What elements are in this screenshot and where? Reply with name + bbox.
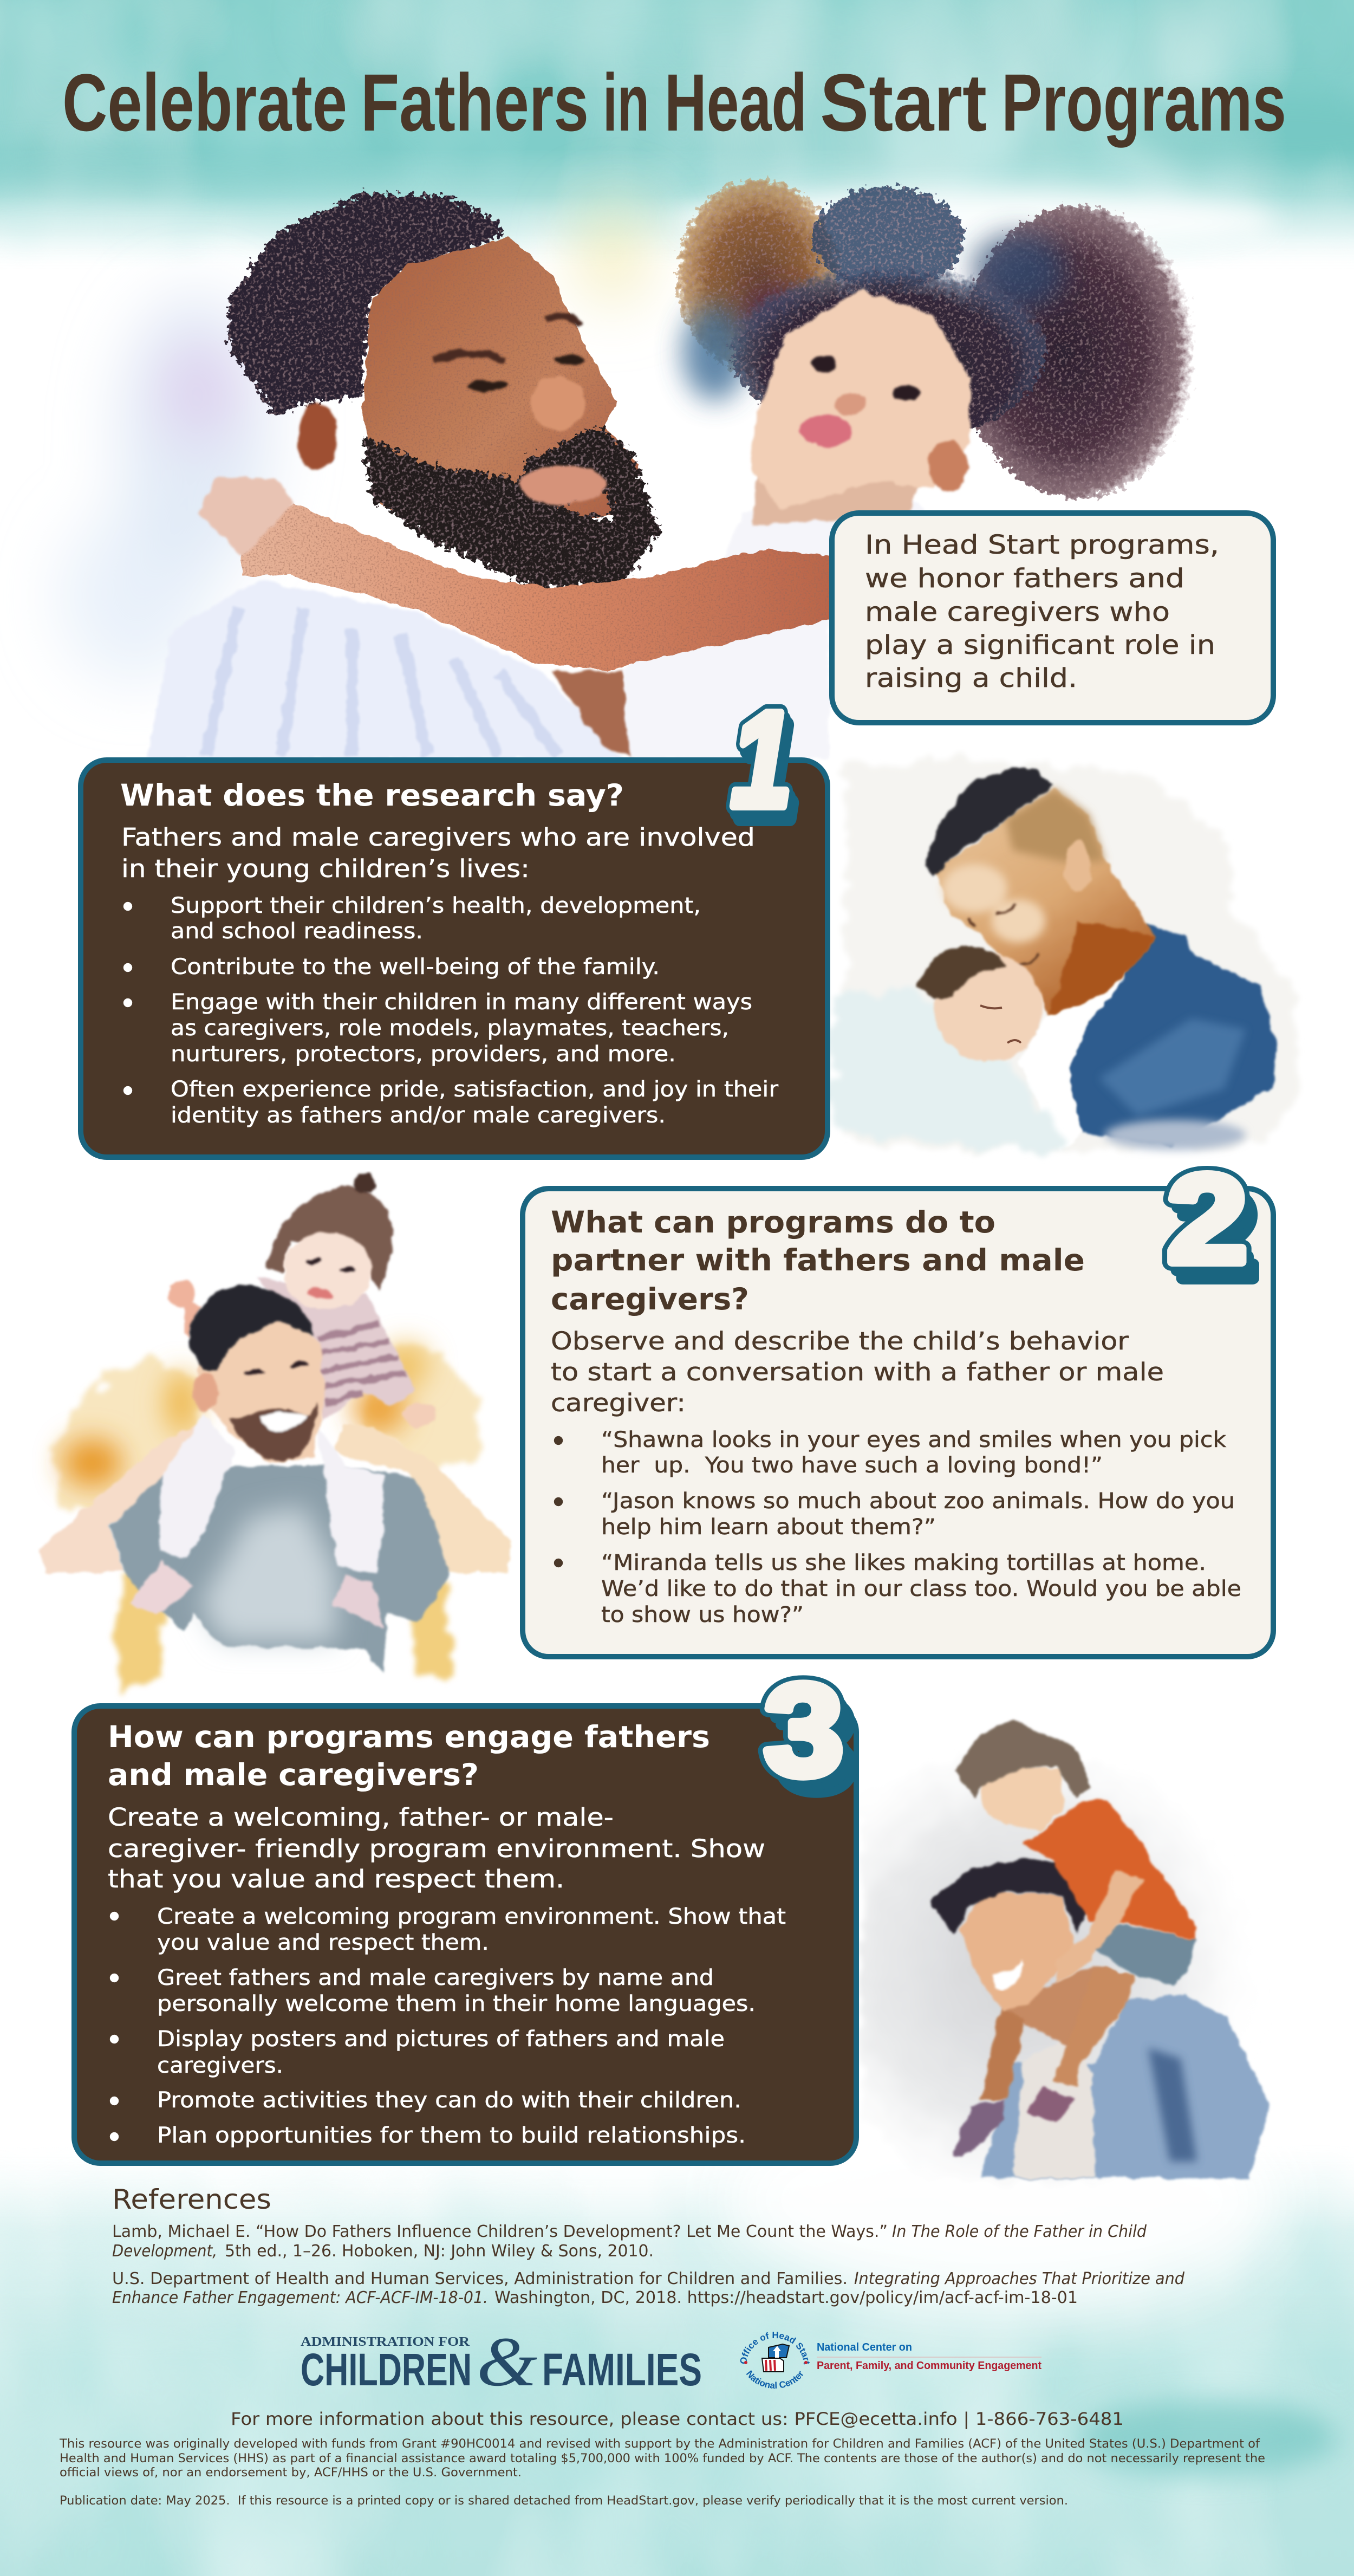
girl's hair left puff <box>677 179 839 374</box>
yellow washes <box>51 1338 485 1696</box>
bullet list: help him learn about them?” <box>601 1515 936 1540</box>
hair <box>925 770 1054 878</box>
bullet list: Plan opportunities for them to build relationships. <box>157 2123 746 2148</box>
title: Fathers <box>361 57 589 148</box>
face lights and features <box>942 864 1045 943</box>
intro text: caregiver: <box>551 1388 686 1417</box>
man's shirt <box>146 581 622 758</box>
man's smile <box>991 1958 1024 1988</box>
bullet list: personally welcome them in their home languages. <box>157 1991 756 2016</box>
reference 2: Washington, DC, 2018. https://headstart.gov/policy/im/acf-acf-im-18-01 <box>494 2288 1078 2307</box>
baby's hair <box>918 945 1007 1002</box>
number 2 badge: 2 <box>1167 1149 1247 1289</box>
shirt dark folds <box>1148 2048 1197 2162</box>
jacket bottom fade <box>1105 1120 1246 1150</box>
number 3 badge: 3 <box>777 1673 856 1818</box>
bullet list: Contribute to the well-being of the family. <box>171 955 660 979</box>
logo: National Center on Parent, Family, and Community Engagement: National Center on <box>817 2341 912 2353</box>
title: Head <box>665 57 807 148</box>
girl's hair right puff <box>961 206 1194 498</box>
intro text: in their young children’s lives: <box>121 854 530 883</box>
callout: intro message: play a significant role in <box>865 630 1215 660</box>
intro text <box>551 1327 1164 1417</box>
number 1 badge: 1 <box>731 684 792 835</box>
reference 1: Lamb, Michael E. “How Do Fathers Influence Children’s Development? Let Me Count the Ways.” <box>112 2222 888 2241</box>
boy's hair <box>955 1720 1091 1799</box>
reference 2: Enhance Father Engagement: ACF-ACF-IM-18-01. <box>112 2288 488 2307</box>
number 2 badge <box>1167 1149 1258 1306</box>
bullet list: “Jason knows so much about zoo animals. How do you <box>601 1489 1235 1514</box>
bullet list: you value and respect them. <box>157 1930 489 1955</box>
logo: Administration for Children & Families: FAMILIES <box>542 2344 702 2395</box>
bullet list: Create a welcoming program environment. Show that <box>157 1904 786 1929</box>
child's raised hand <box>167 1280 200 1338</box>
child's striped shirt <box>256 1279 416 1420</box>
heading <box>551 1205 1085 1316</box>
father's closed eyes and mouth <box>969 904 1040 970</box>
illustration: father carrying daughter on shoulders, yellow wash <box>40 1173 511 1696</box>
jacket highlight <box>1099 1018 1246 1116</box>
panel 1: what does the research say <box>81 760 828 1157</box>
girl's features <box>800 356 967 490</box>
bullet list <box>123 893 779 1128</box>
boy's shoes <box>953 2086 1074 2156</box>
heading: caregivers? <box>551 1282 749 1316</box>
intro text: Create a welcoming, father- or male- <box>108 1803 614 1832</box>
reference 2 <box>112 2269 1185 2307</box>
father's head and neck <box>935 788 1155 1016</box>
bullet list: and school readiness. <box>171 919 423 944</box>
heading: How can programs engage fathers <box>108 1720 710 1754</box>
logo: Office of Head Start National Center seal <box>740 2332 810 2389</box>
girl's hair top <box>812 187 964 290</box>
boy's face <box>980 1766 1064 1830</box>
illustration: father holding daughter (hero) <box>60 179 1194 758</box>
funding disclaimer: official views of, nor an endorsement by, ACF/HHS or the U.S. Government. <box>60 2466 522 2480</box>
panel 2: what can programs do <box>523 1189 1273 1657</box>
girl's neck <box>753 466 921 525</box>
funding disclaimer: This resource was originally developed with funds from Grant #90HC0014 and revised with support by the Administration for Children and Families (ACF) of the United States (U.S.) Department of <box>59 2437 1260 2451</box>
number 1 badge: 1 <box>734 690 795 841</box>
girl's hand <box>199 477 294 556</box>
intro text: to start a conversation with a father or male <box>551 1358 1164 1386</box>
child's extended hand <box>403 1401 436 1427</box>
man's ear <box>297 403 340 470</box>
callout: intro message: male caregivers who <box>865 597 1170 627</box>
man's beard <box>362 426 660 588</box>
yellow saturated spots <box>62 1344 428 1487</box>
title <box>62 57 1286 148</box>
funding disclaimer <box>59 2437 1265 2480</box>
man's beard and smile <box>194 1362 317 1460</box>
callout: intro message: we honor fathers and <box>865 563 1184 594</box>
man's neck and chest <box>1000 1965 1128 2047</box>
title: Start <box>820 57 987 148</box>
child's shoes <box>128 1562 383 1628</box>
man's mouth <box>520 465 607 504</box>
bullet list: identity as fathers and/or male caregivers. <box>171 1103 666 1128</box>
publication date: Publication date: May 2025. If this resource is a printed copy or is shared detached from HeadStart.gov, please verify periodically that it is the most current version. <box>60 2494 1068 2508</box>
man's hair <box>190 1285 313 1371</box>
baby's head <box>934 953 1043 1062</box>
number 1 badge: 1 <box>731 684 792 835</box>
callout: intro message: In Head Start programs, <box>865 530 1219 560</box>
callout: intro message: raising a child. <box>865 663 1077 693</box>
bullet list: nurturers, protectors, providers, and more. <box>171 1042 676 1067</box>
bullet list: Promote activities they can do with their children. <box>157 2088 741 2113</box>
fade haircut side <box>1006 788 1105 861</box>
baby's closed eye and mouth <box>980 1005 1021 1043</box>
ear <box>1065 840 1091 894</box>
child's bun <box>354 1173 375 1195</box>
bullet list <box>554 1427 1241 1627</box>
heading: What does the research say? <box>120 778 624 813</box>
t-shirt <box>1018 980 1123 1154</box>
child's face <box>283 1231 372 1309</box>
logo: Office of Head Start National Center seal: Office of Head Start <box>740 2332 810 2364</box>
bullet list: her up. You two have such a loving bond!” <box>601 1453 1103 1478</box>
logo: National Center on Parent, Family, and Community Engagement <box>817 2341 1041 2372</box>
number 1 badge: 1 <box>738 696 798 847</box>
bullet list: “Miranda tells us she likes making tortillas at home. <box>601 1550 1206 1575</box>
number 3 badge: 3 <box>764 1657 843 1802</box>
bullet list: Support their children’s health, development, <box>171 893 701 918</box>
heading: partner with fathers and male <box>551 1243 1085 1277</box>
intro text: caregiver- friendly program environment. Show <box>108 1834 765 1863</box>
girl's dress <box>622 477 924 758</box>
girl's arm around father's neck <box>242 503 831 670</box>
heading <box>108 1720 710 1792</box>
logo: Administration for Children & Families: CHILDREN <box>301 2344 472 2395</box>
bullet list: Greet fathers and male caregivers by name and <box>157 1965 714 1990</box>
bullet list <box>110 1904 786 2148</box>
girl's face <box>753 290 969 509</box>
intro text: Observe and describe the child’s behavior <box>551 1327 1129 1355</box>
funding disclaimer: Health and Human Services (HHS) as part of a financial assistance award totaling $5,700,000 with 100% funded by ACF. The contents are those of the author(s) and do not necessarily represent the <box>60 2452 1265 2465</box>
references heading: References <box>112 2184 271 2215</box>
heading: What can programs do to <box>551 1205 995 1240</box>
callout: intro message <box>832 513 1273 723</box>
intro text <box>121 823 755 883</box>
boy's legs <box>981 1968 1135 2100</box>
number 2 badge: 2 <box>1173 1157 1253 1297</box>
girl's hair blue right <box>972 233 1064 309</box>
title: Celebrate <box>62 57 347 148</box>
logo: National Center on Parent, Family, and Community Engagement: Parent, Family, and Community Engagement <box>817 2360 1041 2372</box>
man's face <box>197 1313 325 1463</box>
boy's shorts <box>1092 1924 1196 1985</box>
bullet list: “Shawna looks in your eyes and smiles when you pick <box>601 1427 1227 1452</box>
reference 1 <box>112 2222 1147 2261</box>
intro text <box>108 1803 765 1893</box>
number 2 badge: 2 <box>1178 1165 1258 1306</box>
pale wash behind figures <box>845 758 1300 1151</box>
reference 1: In The Role of the Father in Child <box>892 2222 1147 2241</box>
title: in <box>603 57 649 148</box>
child's features <box>307 1258 355 1299</box>
child's hair <box>265 1186 393 1292</box>
logo: Administration for Children & Families <box>301 2323 702 2401</box>
bullet list: to show us how?” <box>601 1602 804 1627</box>
number 3 badge: 3 <box>764 1657 843 1802</box>
reference 1: 5th ed., 1–26. Hoboken, NJ: John Wiley & Sons, 2010. <box>225 2242 654 2261</box>
man's features <box>433 315 585 431</box>
girl's hair blue <box>682 303 747 401</box>
bullet list: as caregivers, role models, playmates, teachers, <box>171 1016 729 1041</box>
man's undershirt <box>1013 2034 1096 2178</box>
references <box>112 2184 1185 2307</box>
grey wash <box>861 1755 1278 2183</box>
girl's hair purple <box>742 287 818 352</box>
bullet list: Often experience pride, satisfaction, and joy in their <box>171 1077 779 1102</box>
girl's hair cap <box>731 249 1045 444</box>
man's shirt <box>110 1465 449 1673</box>
man's face <box>959 1891 1078 2011</box>
bullet list: caregivers. <box>157 2053 283 2078</box>
logo: Administration for Children & Families: ADMINISTRATION FOR <box>301 2335 470 2349</box>
intro text: that you value and respect them. <box>108 1865 564 1893</box>
bullet list: We’d like to do that in our class too. Would you be able <box>601 1576 1241 1601</box>
blanket <box>833 988 1068 1154</box>
number 3 badge: 3 <box>772 1666 851 1811</box>
reference 1: Development, <box>112 2242 217 2261</box>
neck shadow <box>1047 921 1155 1016</box>
bullet list: Engage with their children in many different ways <box>171 990 752 1015</box>
intro text: Fathers and male caregivers who are involved <box>121 823 755 852</box>
reference 2: U.S. Department of Health and Human Services, Administration for Children and Families. <box>112 2269 848 2288</box>
man's shirt <box>981 1995 1270 2178</box>
man's arms <box>40 1424 511 1573</box>
shirt highlight <box>200 1506 336 1641</box>
hero soft background washes <box>60 206 645 683</box>
logo: Office of Head Start National Center seal: National Center <box>746 2370 803 2389</box>
logo: Administration for Children & Families: & <box>477 2323 537 2401</box>
number 2 badge: 2 <box>1167 1149 1247 1289</box>
reference 2: Integrating Approaches That Prioritize and <box>854 2269 1185 2288</box>
child's legs <box>159 1413 383 1573</box>
bullet list: Display posters and pictures of fathers and male <box>157 2027 725 2052</box>
boy's orange shirt <box>1023 1801 1197 1939</box>
panel 3: how can programs engage <box>74 1706 856 2163</box>
man's hair <box>229 193 501 416</box>
heading: and male caregivers? <box>108 1757 479 1792</box>
contact line: For more information about this resource, please contact us: PFCE@ecetta.info | 1-866-763-6481 <box>231 2409 1124 2429</box>
man's face <box>362 237 639 553</box>
man's neck <box>552 670 635 758</box>
jacket <box>1068 925 1277 1146</box>
illustration: father with boy on shoulders <box>861 1720 1278 2183</box>
boy's arm <box>1056 1869 1143 1983</box>
illustration: father and sleeping baby <box>833 758 1300 1154</box>
man's hair <box>929 1858 1089 1934</box>
